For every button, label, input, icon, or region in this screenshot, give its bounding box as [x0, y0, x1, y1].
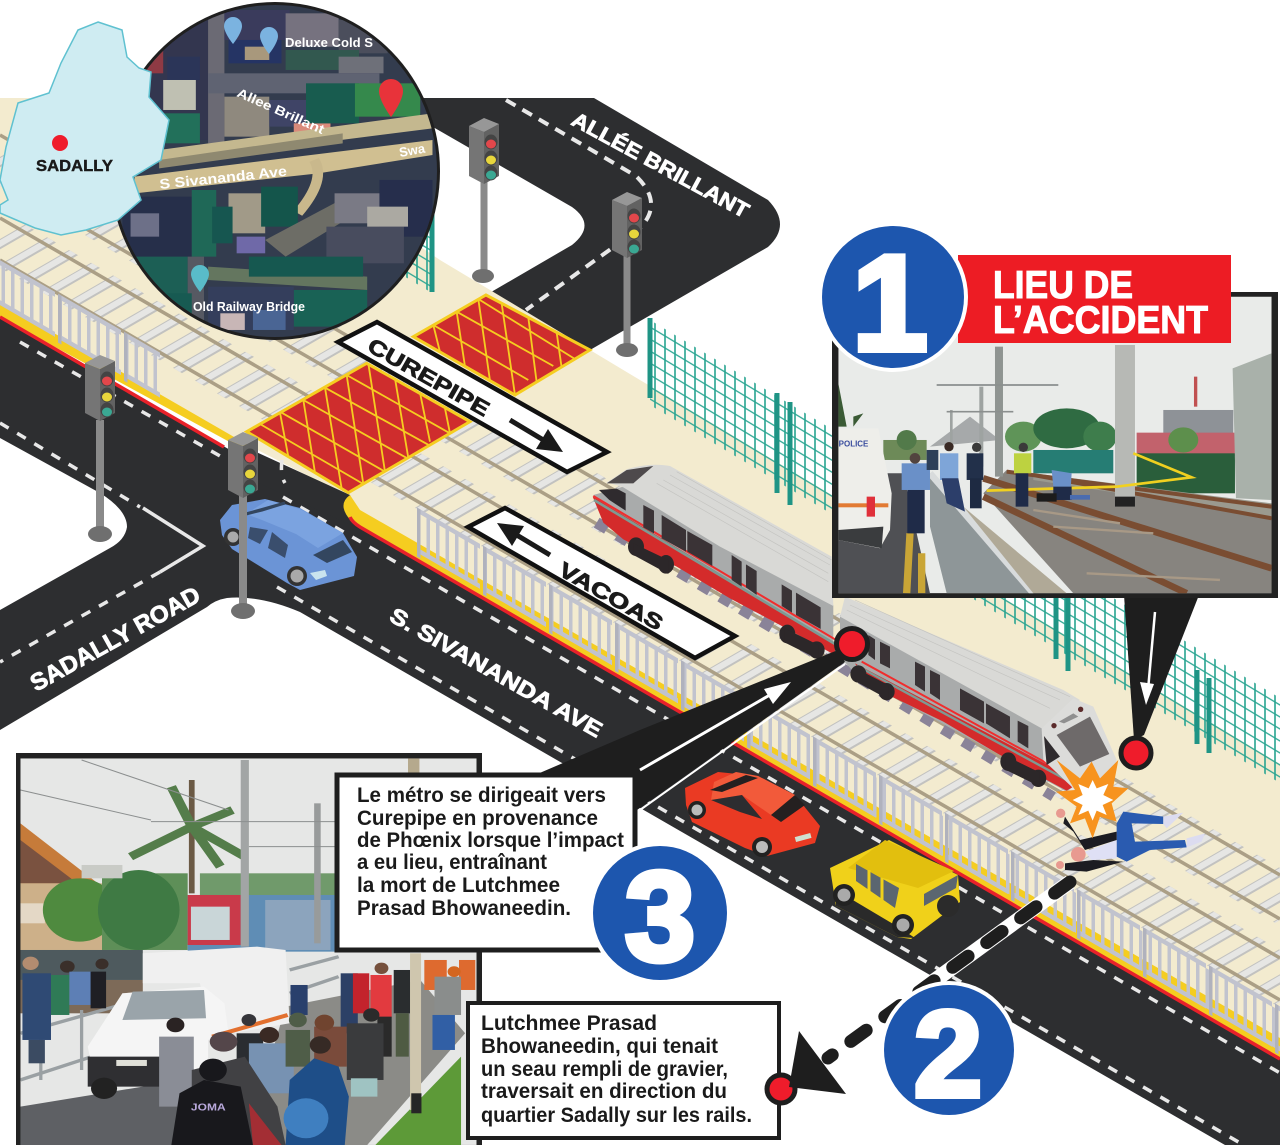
number badge 1 [818, 222, 968, 379]
map label: Swa: Swa [398, 141, 427, 160]
text box 2: quartier Sadally sur les rails. [481, 1104, 752, 1127]
road: S. Sivananda Ave and Sadally Road [0, 302, 1280, 1145]
front railing, left [0, 258, 160, 395]
number badge 3 [589, 842, 731, 987]
sign: Curepipe [338, 322, 607, 472]
text box 2: Lutchmee Prasad [481, 1012, 657, 1035]
number badge 1: 1 [852, 227, 928, 379]
number badge 2: 2 [914, 986, 982, 1122]
text box 3: Prasad Bhowaneedin. [357, 897, 571, 920]
map label: Deluxe Cold: Deluxe Cold S [285, 35, 373, 50]
red title box [958, 255, 1231, 343]
railway tracks [0, 135, 1280, 1000]
title line 2: L’ACCIDENT [993, 299, 1208, 342]
marker dot 3 [836, 628, 868, 660]
red crossing north [413, 295, 590, 395]
callout pointer to train [535, 650, 845, 810]
label: Sadally Road: SADALLY ROAD [26, 582, 205, 697]
dashed path of victim [828, 882, 1070, 1058]
text box 3: a eu lieu, entraînant [357, 851, 547, 874]
text box 2: traversait en direction du [481, 1080, 727, 1103]
map label: Allee Brillant: Allee Brillant [235, 85, 327, 137]
text box 2: Bhowaneedin, qui tenait [481, 1035, 718, 1058]
label: S. Sivananda Ave: S. SIVANANDA AVE [386, 603, 607, 743]
map label: S Sivananda Ave: S Sivananda Ave [159, 163, 288, 192]
map pin: blue cart [260, 27, 278, 54]
text box 3: Le métro se dirigeait vers [357, 784, 606, 807]
photo: accident site [832, 292, 1278, 598]
text box 3: la mort de Lutchmee [357, 874, 560, 897]
text box 3 [337, 775, 635, 950]
map pin: red accident [379, 79, 403, 117]
green fence back [400, 186, 1280, 789]
sign: Vacoas [468, 508, 735, 658]
explosion [1056, 760, 1128, 838]
pointer arrow [1140, 612, 1155, 705]
text box 2 [468, 1003, 779, 1138]
car: yellow jeep [830, 840, 960, 939]
photo: accident site: POLICE [839, 440, 869, 449]
map of Mauritius [0, 22, 169, 235]
text box 2: un seau rempli de gravier, [481, 1058, 728, 1081]
train: rear carriage [593, 465, 837, 666]
car: blue [220, 499, 357, 590]
traffic light 2 [228, 432, 258, 619]
accident victim [1056, 809, 1205, 872]
location label: SADALLY [36, 158, 113, 175]
map inset: satellite circle [100, 0, 450, 340]
marker dot 2 [767, 1075, 795, 1103]
photo: crowd and metro [16, 753, 482, 1145]
map label: Old Railway Bridge: Old Railway Bridge [193, 299, 305, 314]
title line 1: LIEU DE [993, 264, 1133, 307]
road: Allée Brillant [420, 98, 780, 350]
map pin: blue shop [224, 17, 242, 44]
sign: Curepipe: CUREPIPE [364, 334, 493, 421]
callout pointer edge [640, 664, 845, 810]
marker dot 1 [1121, 738, 1151, 768]
number badge 3: 3 [625, 846, 695, 987]
label: Allée Brillant: ALLÉE BRILLANT [568, 108, 753, 223]
pointer to photo [1124, 595, 1199, 740]
dashed path arrowhead [789, 1031, 846, 1094]
text box 3: de Phœnix lorsque l’impact [357, 829, 624, 852]
photo: crowd and metro: JOMA [191, 1103, 226, 1113]
traffic light 1 [85, 355, 115, 542]
map pin: bridge [191, 265, 209, 292]
traffic light 4 [612, 192, 642, 357]
front railing, right [417, 510, 1280, 1053]
location dot [52, 135, 68, 151]
train: front carriage [840, 597, 1117, 797]
sign: Vacoas: VACOAS [555, 558, 667, 635]
text box 3: Curepipe en provenance [357, 807, 598, 830]
traffic light 3 [469, 118, 499, 283]
car: red [685, 772, 820, 857]
red crossing south [247, 363, 470, 493]
callout pointer arrow [640, 682, 791, 770]
number badge 2 [880, 981, 1018, 1122]
